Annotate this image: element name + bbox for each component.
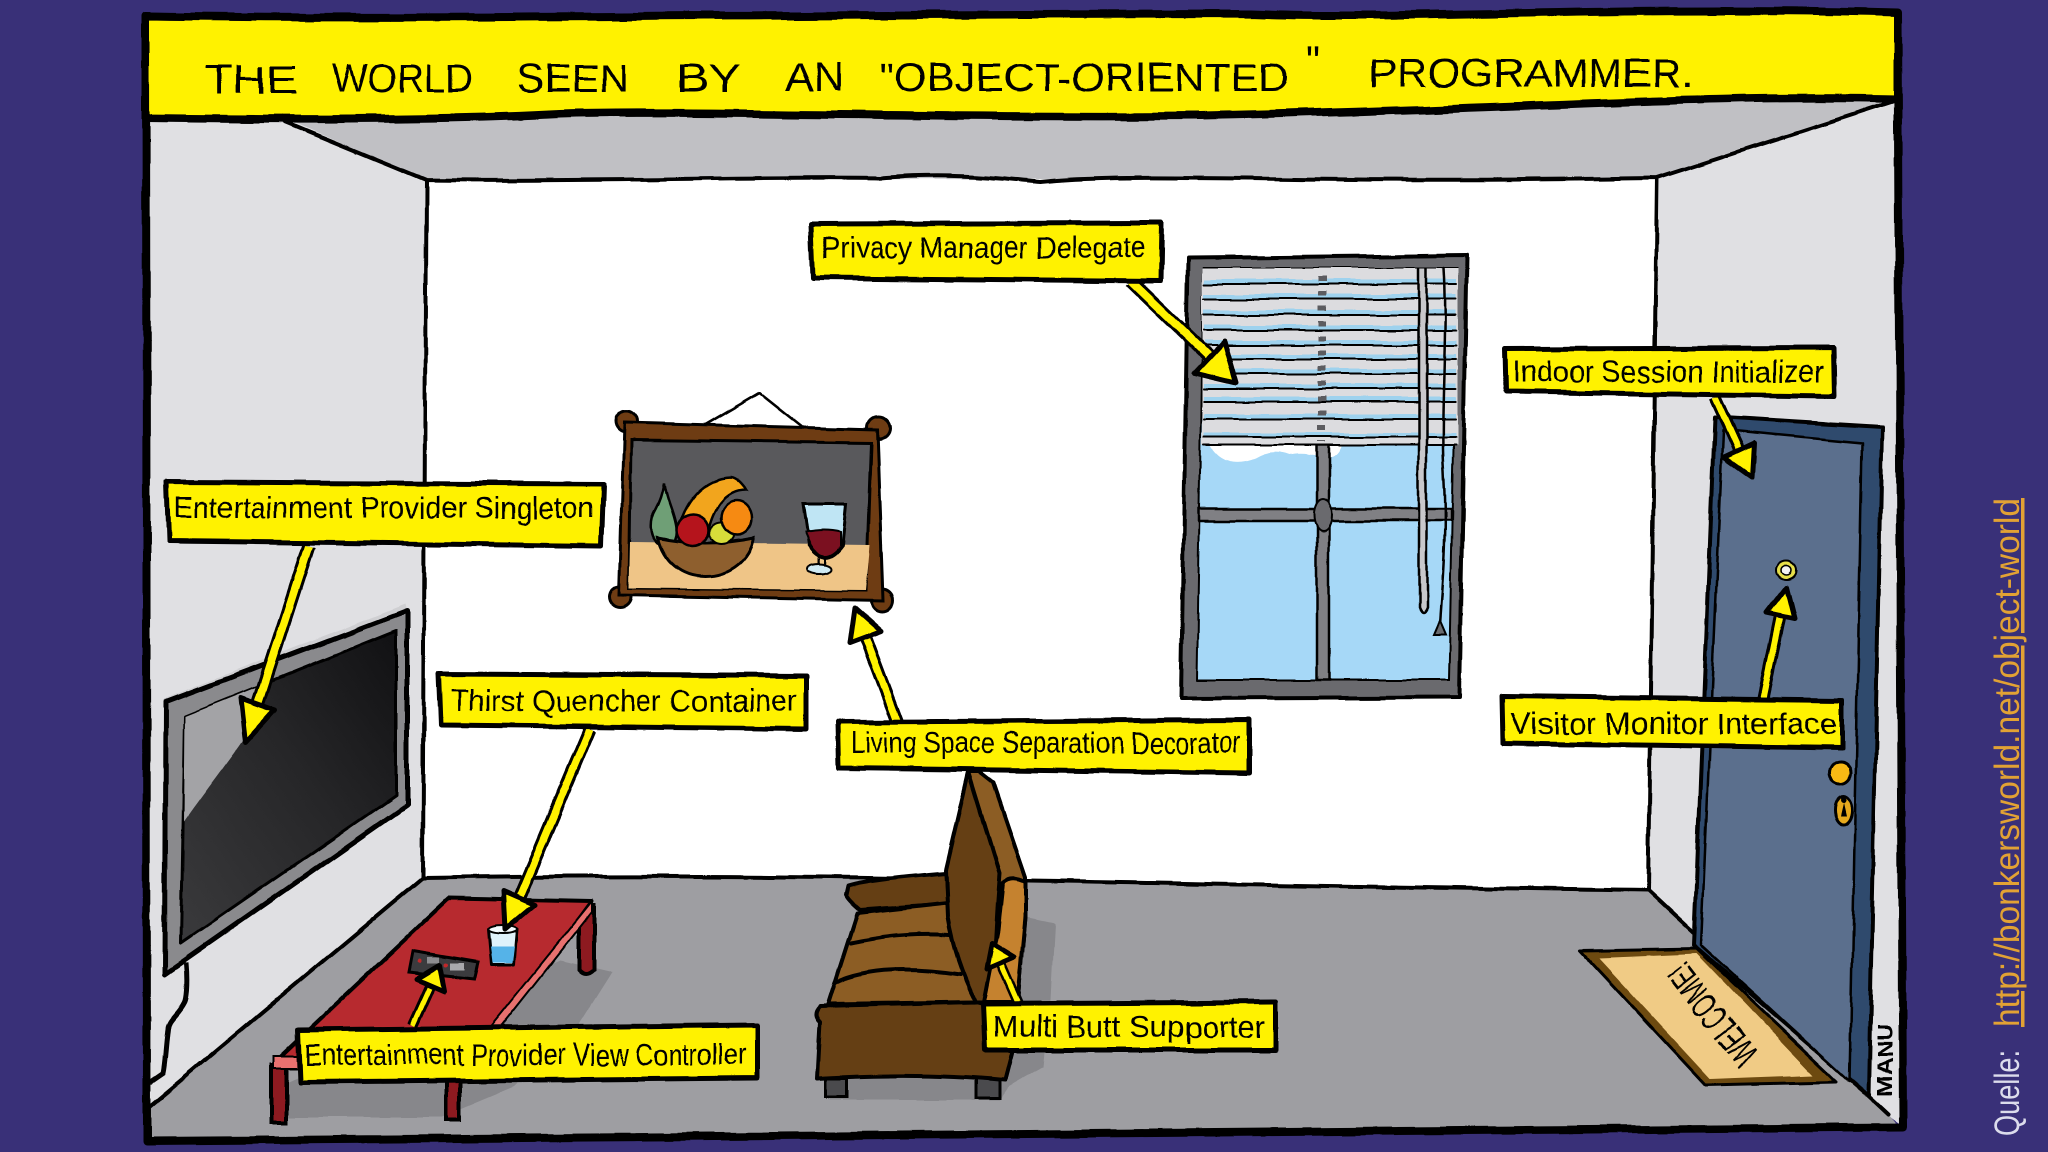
picture frame	[609, 411, 893, 611]
armrest back	[846, 873, 948, 910]
mat border	[1580, 949, 1837, 1085]
framed picture	[609, 393, 893, 611]
label: Visitor Monitor Interface: Visitor Monitor Interface	[1511, 706, 1837, 741]
sofa base	[816, 1002, 1012, 1080]
rear sofa foot	[976, 1078, 1000, 1098]
wine glass	[803, 504, 847, 574]
label: Living Space Separation Decorator	[837, 720, 1250, 773]
seat cushions	[828, 903, 976, 1004]
arrow: View Controller to remote	[413, 965, 445, 1025]
pear	[652, 483, 677, 545]
orange	[722, 501, 752, 535]
lime	[710, 522, 734, 544]
label: Entertainment Provider View Controller	[298, 1025, 757, 1082]
title text: BY	[676, 57, 741, 101]
sofa back inner side	[946, 772, 1000, 1002]
window frame	[1181, 255, 1467, 698]
signature: MANU	[1874, 1024, 1897, 1096]
title text: "OBJECT-ORIENTED	[879, 56, 1289, 100]
arrow: Visitor Monitor Interface to peephole	[1763, 587, 1794, 698]
tv cable	[150, 963, 187, 1082]
arrow: Living Space Separation Decorator to picture	[850, 607, 898, 722]
blinds	[1202, 268, 1458, 445]
label: Indoor Session Initializer: Indoor Session Initializer	[1513, 354, 1824, 389]
picture background	[629, 440, 871, 590]
label: Thirst Quencher Container	[439, 674, 806, 729]
cushion lines	[836, 934, 960, 982]
sofa shadow	[830, 917, 1055, 1100]
label: Living Space Separation Decorator: Living Space Separation Decorator	[851, 725, 1241, 760]
sofa	[816, 772, 1055, 1100]
tv screen	[181, 631, 396, 943]
banana	[678, 477, 746, 535]
table shadow	[282, 960, 612, 1117]
fruit bowl	[658, 538, 754, 577]
arrow: Indoor Session Initializer to door	[1715, 397, 1754, 477]
window latch	[1314, 499, 1332, 531]
table front edge	[273, 1056, 300, 1068]
room outlines	[150, 100, 1898, 1114]
door	[1694, 417, 1897, 1096]
tv bezel	[165, 611, 407, 974]
right wall	[1648, 98, 1900, 1124]
label: Indoor Session Initializer	[1505, 348, 1834, 396]
coffee table	[271, 898, 612, 1122]
left wall	[148, 116, 426, 1106]
tv shadow	[166, 604, 409, 712]
title text: WORLD	[332, 57, 473, 101]
label: Multi Butt Supporter	[983, 1002, 1276, 1050]
label: Entertainment Provider View Controller: Entertainment Provider View Controller	[304, 1037, 746, 1072]
armrest cushion	[984, 879, 1026, 1002]
mat surface	[1598, 954, 1813, 1079]
glass of water	[489, 926, 517, 964]
arrow: Privacy Manager Delegate to blinds	[1130, 281, 1236, 383]
hanging wire	[702, 393, 804, 428]
title text: AN	[785, 56, 845, 100]
arrow: Multi Butt Supporter to sofa	[987, 943, 1019, 1004]
front left table leg	[271, 1065, 286, 1122]
title banner	[146, 11, 1898, 119]
welcome mat	[1580, 949, 1837, 1085]
label: Entertainment Provider Singleton	[167, 482, 603, 546]
keyhole plate	[1834, 797, 1852, 825]
window crossbars	[1199, 445, 1451, 680]
banner background	[146, 11, 1898, 119]
label: Thirst Quencher Container: Thirst Quencher Container	[451, 683, 797, 718]
arrow: Entertainment Provider Singleton to TV	[241, 546, 309, 742]
front sofa foot	[826, 1078, 846, 1097]
blind cords	[1419, 268, 1446, 634]
source credit: http://bonkersworld.net/object-world	[1988, 498, 2027, 1027]
label: Multi Butt Supporter: Multi Butt Supporter	[992, 1009, 1266, 1044]
door knob	[1829, 762, 1851, 784]
door panel	[1701, 430, 1862, 1082]
screen reflection	[184, 682, 270, 822]
window	[1181, 255, 1467, 698]
cloud	[1210, 445, 1342, 462]
picture tabletop	[629, 542, 870, 590]
arrow: Thirst Quencher Container to glass	[503, 729, 590, 930]
peephole	[1777, 561, 1797, 579]
floor	[148, 878, 1900, 1140]
label: Entertainment Provider Singleton: Entertainment Provider Singleton	[174, 490, 594, 525]
sofa back outer side	[969, 772, 1026, 1002]
ceiling	[283, 98, 1898, 180]
label: Visitor Monitor Interface	[1502, 696, 1842, 748]
title text: SEEN	[517, 57, 628, 101]
room	[148, 98, 1900, 1140]
title text	[204, 39, 1693, 102]
table top	[273, 898, 592, 1066]
television	[150, 604, 409, 1082]
back wall	[423, 178, 1657, 890]
source credit: Quelle:	[1988, 1050, 2027, 1136]
table edge	[488, 901, 592, 1032]
title text: THE	[204, 58, 298, 102]
title text: "	[1306, 39, 1320, 83]
mat text: WELCOME!	[1659, 955, 1765, 1074]
title text: PROGRAMMER.	[1369, 52, 1693, 96]
back table leg	[579, 905, 594, 974]
label: Privacy Manager Delegate	[811, 223, 1162, 281]
remote control	[409, 951, 478, 979]
label: Privacy Manager Delegate: Privacy Manager Delegate	[822, 230, 1146, 265]
apple	[677, 514, 709, 546]
sky	[1197, 268, 1457, 680]
door frame	[1694, 417, 1882, 1096]
front middle table leg	[446, 1080, 460, 1120]
